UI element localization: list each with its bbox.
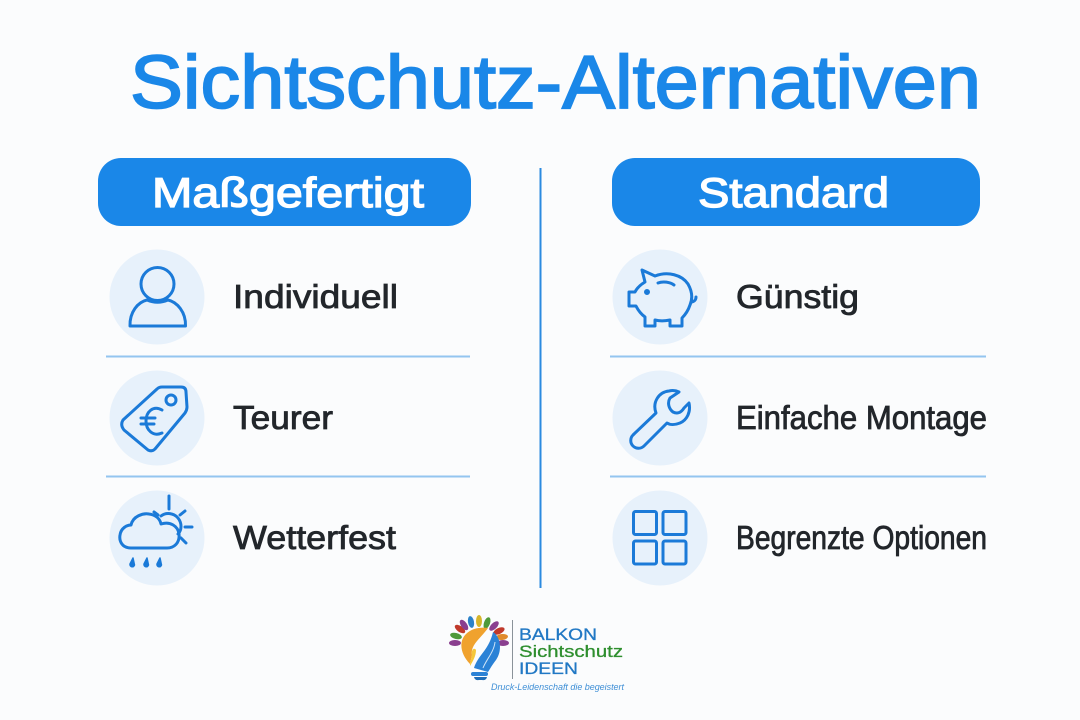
icon: wrench bbox=[631, 391, 690, 448]
item: Teurer: Teurer bbox=[233, 399, 333, 436]
item: Begrenzte Optionen: Begrenzte Optionen bbox=[736, 519, 987, 556]
logo bbox=[449, 615, 624, 692]
heading: Standard: Standard bbox=[698, 169, 889, 216]
icon: person bbox=[130, 268, 186, 326]
item: Begrenzte Optionen bbox=[612, 490, 987, 586]
logo wordmark: Sichtschutz bbox=[519, 642, 623, 661]
heading: Maßgefertigt bbox=[98, 158, 471, 226]
logo wordmark: IDEEN bbox=[519, 659, 578, 678]
icon: colorful light bulb bbox=[449, 615, 509, 680]
item: Wetterfest: Wetterfest bbox=[233, 519, 396, 556]
title: Sichtschutz-Alternativen bbox=[130, 40, 981, 124]
heading: Maßgefertigt: Maßgefertigt bbox=[152, 169, 424, 216]
item: Individuell: Individuell bbox=[233, 278, 398, 315]
logo wordmark: BALKON bbox=[519, 625, 597, 644]
panel: Standard bbox=[610, 158, 987, 586]
icon: cloud with sun and rain bbox=[120, 496, 192, 567]
icon: piggy bank bbox=[629, 270, 696, 326]
item: Günstig: Günstig bbox=[736, 278, 859, 315]
item: Teurer bbox=[110, 370, 333, 466]
item: Günstig bbox=[612, 250, 859, 344]
center divider bbox=[540, 168, 542, 588]
icon: four squares grid bbox=[634, 512, 686, 564]
panel: Maßgefertigt bbox=[98, 158, 471, 586]
item: Einfache Montage bbox=[612, 370, 987, 466]
item: Einfache Montage: Einfache Montage bbox=[736, 399, 987, 436]
logo tagline: Druck-Leidenschaft die begeistert bbox=[491, 682, 624, 692]
item: Individuell bbox=[110, 250, 398, 344]
item: Wetterfest bbox=[110, 490, 396, 586]
icon: euro price tag bbox=[122, 387, 187, 451]
logo wordmark bbox=[519, 625, 623, 678]
heading: Standard bbox=[612, 158, 980, 226]
